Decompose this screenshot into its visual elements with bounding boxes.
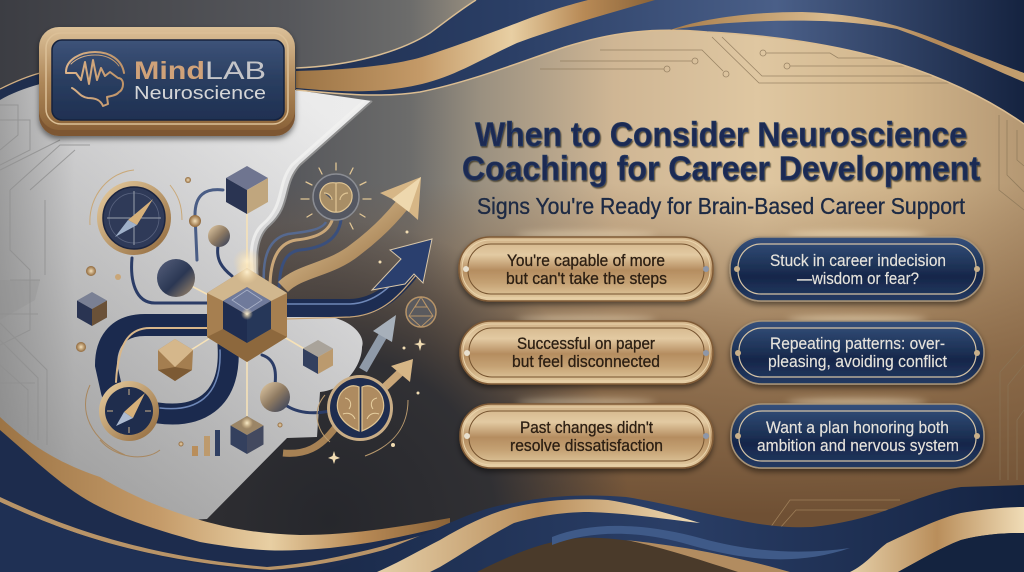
title: Coaching for Career Development bbox=[462, 150, 980, 188]
logo panel bbox=[52, 40, 284, 120]
card: past changes: Past changes didn't bbox=[520, 419, 653, 437]
icon: geodesic ball bbox=[406, 297, 436, 327]
arrow: big gold bbox=[283, 177, 421, 287]
ribbon: left gold bbox=[0, 417, 450, 551]
card: plan honoring bbox=[731, 399, 984, 468]
card: past changes: resolve dissatisfaction bbox=[510, 437, 663, 455]
card: career indecision: Stuck in career indecision bbox=[770, 252, 946, 270]
left ribbon by logo bbox=[0, 73, 40, 100]
icon: brain pulse bbox=[66, 52, 124, 106]
title bbox=[462, 116, 980, 188]
logo text: LAB bbox=[205, 57, 266, 85]
icon: brain light bulb bbox=[264, 163, 371, 288]
top ribbons bbox=[296, 0, 1024, 124]
bar chart icon bbox=[192, 430, 220, 456]
card: plan honoring: Want a plan honoring both bbox=[766, 419, 949, 437]
card: plan honoring: ambition and nervous system bbox=[757, 437, 959, 455]
arrow: gray bbox=[363, 315, 396, 370]
arrow: small gold with swoosh bbox=[283, 359, 413, 456]
card: capable of more: but can't take the steps bbox=[506, 270, 667, 288]
icon: gold polyhedron bbox=[158, 339, 193, 381]
card: successful on paper: Successful on paper bbox=[517, 335, 655, 353]
icon: left cube bbox=[77, 292, 107, 326]
logo text bbox=[134, 57, 266, 103]
icon: right cube bbox=[303, 340, 333, 374]
bottom ribbons bbox=[0, 417, 1024, 572]
icon: top cube bbox=[226, 166, 268, 214]
icon: brain medallion bbox=[327, 375, 393, 441]
ribbon: right gold bbox=[850, 507, 1024, 572]
logo text: Mind bbox=[134, 57, 205, 85]
illustration: career pathway network bbox=[76, 163, 436, 464]
logo text: Neuroscience bbox=[134, 83, 266, 103]
card: successful on paper bbox=[460, 316, 713, 384]
ribbon: left navy sweep bbox=[0, 425, 900, 572]
card: successful on paper: but feel disconnected bbox=[512, 353, 660, 371]
connector tubes bbox=[106, 190, 420, 414]
sparkles bbox=[328, 230, 426, 464]
card: capable of more: You're capable of more bbox=[507, 252, 665, 270]
ribbon: center brown underlap bbox=[477, 538, 760, 572]
icon: compass upper bbox=[90, 170, 182, 255]
card: repeating patterns bbox=[731, 316, 984, 384]
ribbon: center navy bbox=[317, 485, 1024, 572]
card: capable of more bbox=[459, 232, 713, 301]
ribbon: center gold upper bbox=[377, 499, 700, 572]
title: When to Consider Neuroscience bbox=[475, 116, 967, 154]
icon: central hexagon hub bbox=[207, 260, 287, 362]
card: repeating patterns: pleasing, avoiding conflict bbox=[768, 353, 947, 371]
panel: right circuit traces bbox=[540, 37, 1024, 528]
icon: compass lower bbox=[85, 381, 160, 457]
card: repeating patterns: Repeating patterns: over- bbox=[770, 335, 945, 353]
subtitle: Signs You're Ready for Brain-Based Career Support bbox=[477, 193, 966, 219]
logo badge bbox=[39, 27, 295, 136]
panel: light silver backdrop bbox=[0, 82, 372, 530]
ribbon: center blue highlight bbox=[552, 526, 850, 559]
arrow: navy bbox=[372, 239, 432, 290]
spheres bbox=[76, 177, 290, 446]
icon: bottom cube bbox=[230, 416, 264, 454]
card: past changes bbox=[460, 399, 713, 468]
light beams bbox=[175, 214, 318, 416]
card: career indecision: —wisdom or fear? bbox=[797, 270, 919, 288]
card: career indecision bbox=[730, 232, 984, 301]
